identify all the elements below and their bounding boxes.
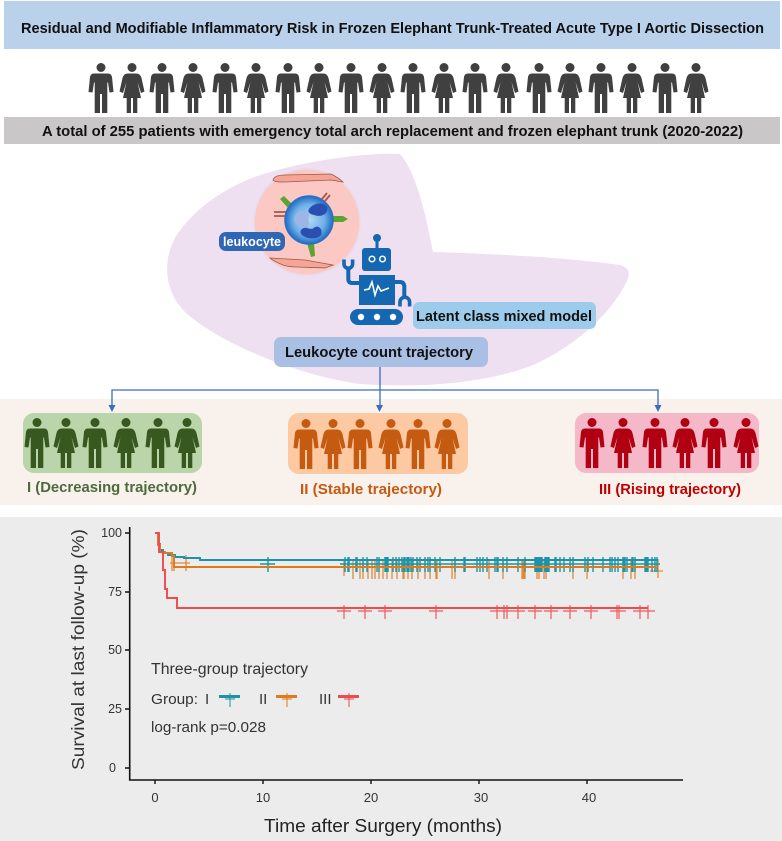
icon: robot xyxy=(344,234,410,325)
arrows: branching to three groups xyxy=(108,367,662,412)
group I: decreasing trajectory: I (Decreasing trajectory) xyxy=(27,480,197,496)
icon: leukocyte illustration xyxy=(254,169,360,275)
label: latent class mixed model xyxy=(413,302,596,329)
panel background: trajectory groups xyxy=(0,399,782,505)
x tick labels: 30 xyxy=(474,790,488,805)
x tick labels: 40 xyxy=(582,790,596,805)
y axis title: Survival at last follow-up (%) xyxy=(68,529,88,770)
cell body xyxy=(285,196,333,244)
y tick labels: 0 xyxy=(109,761,116,775)
group III censor ticks xyxy=(337,605,655,619)
label: leukocyte xyxy=(219,232,285,251)
group II: stable trajectory: II (Stable trajectory) xyxy=(300,482,442,498)
label: leukocyte count trajectory: Leukocyte count trajectory xyxy=(285,345,473,361)
vessel wall top xyxy=(273,174,343,182)
y tick labels xyxy=(101,526,122,775)
y tick labels: 25 xyxy=(108,702,122,716)
title banner xyxy=(4,1,780,49)
x tick labels xyxy=(151,790,596,805)
label: leukocyte count trajectory xyxy=(274,337,488,367)
cohort description band: A total of 255 patients with emergency total arch replacement and frozen elephant trunk (2020-2022) xyxy=(42,124,743,140)
group I: decreasing trajectory xyxy=(23,413,202,496)
group I censor ticks xyxy=(260,557,660,572)
chart: Kaplan-Meier survival curves xyxy=(68,526,683,836)
group III: rising trajectory: III (Rising trajectory) xyxy=(599,482,741,498)
axes xyxy=(125,527,683,784)
x tick labels: 20 xyxy=(364,790,378,805)
icon row: patient cohort xyxy=(88,63,708,113)
title banner: Residual and Modifiable Inflammatory Risk in Frozen Elephant Trunk-Treated Acute Type I Aortic Dissection xyxy=(21,21,764,37)
group I curve xyxy=(155,533,658,560)
vessel wall bottom xyxy=(270,258,333,268)
x axis title: Time after Surgery (months) xyxy=(264,815,502,836)
chart legend: Group: xyxy=(151,691,198,708)
label: latent class mixed model: Latent class mixed model xyxy=(416,309,592,325)
lilac background shape xyxy=(167,154,629,385)
group III curve xyxy=(155,533,648,608)
y tick labels: 75 xyxy=(108,585,122,599)
chart legend xyxy=(151,661,359,736)
group III: rising trajectory xyxy=(575,413,759,498)
chart legend: log-rank p=0.028 xyxy=(151,719,266,736)
cohort description band xyxy=(4,117,780,144)
chart legend: II xyxy=(259,691,267,708)
group II: stable trajectory xyxy=(288,413,468,498)
x tick labels: 10 xyxy=(256,790,270,805)
chart legend: Three-group trajectory xyxy=(151,661,308,678)
nucleus xyxy=(308,203,327,216)
group II censor ticks xyxy=(170,555,663,579)
x tick labels: 0 xyxy=(151,790,159,805)
panel: survival chart background xyxy=(0,517,782,841)
label: leukocyte: leukocyte xyxy=(223,235,281,249)
y tick labels: 50 xyxy=(108,643,122,657)
chart legend: III xyxy=(319,691,332,708)
receptors xyxy=(280,196,348,257)
y tick labels: 100 xyxy=(101,526,122,540)
chart legend: I xyxy=(205,691,209,708)
group II curve xyxy=(155,533,658,567)
